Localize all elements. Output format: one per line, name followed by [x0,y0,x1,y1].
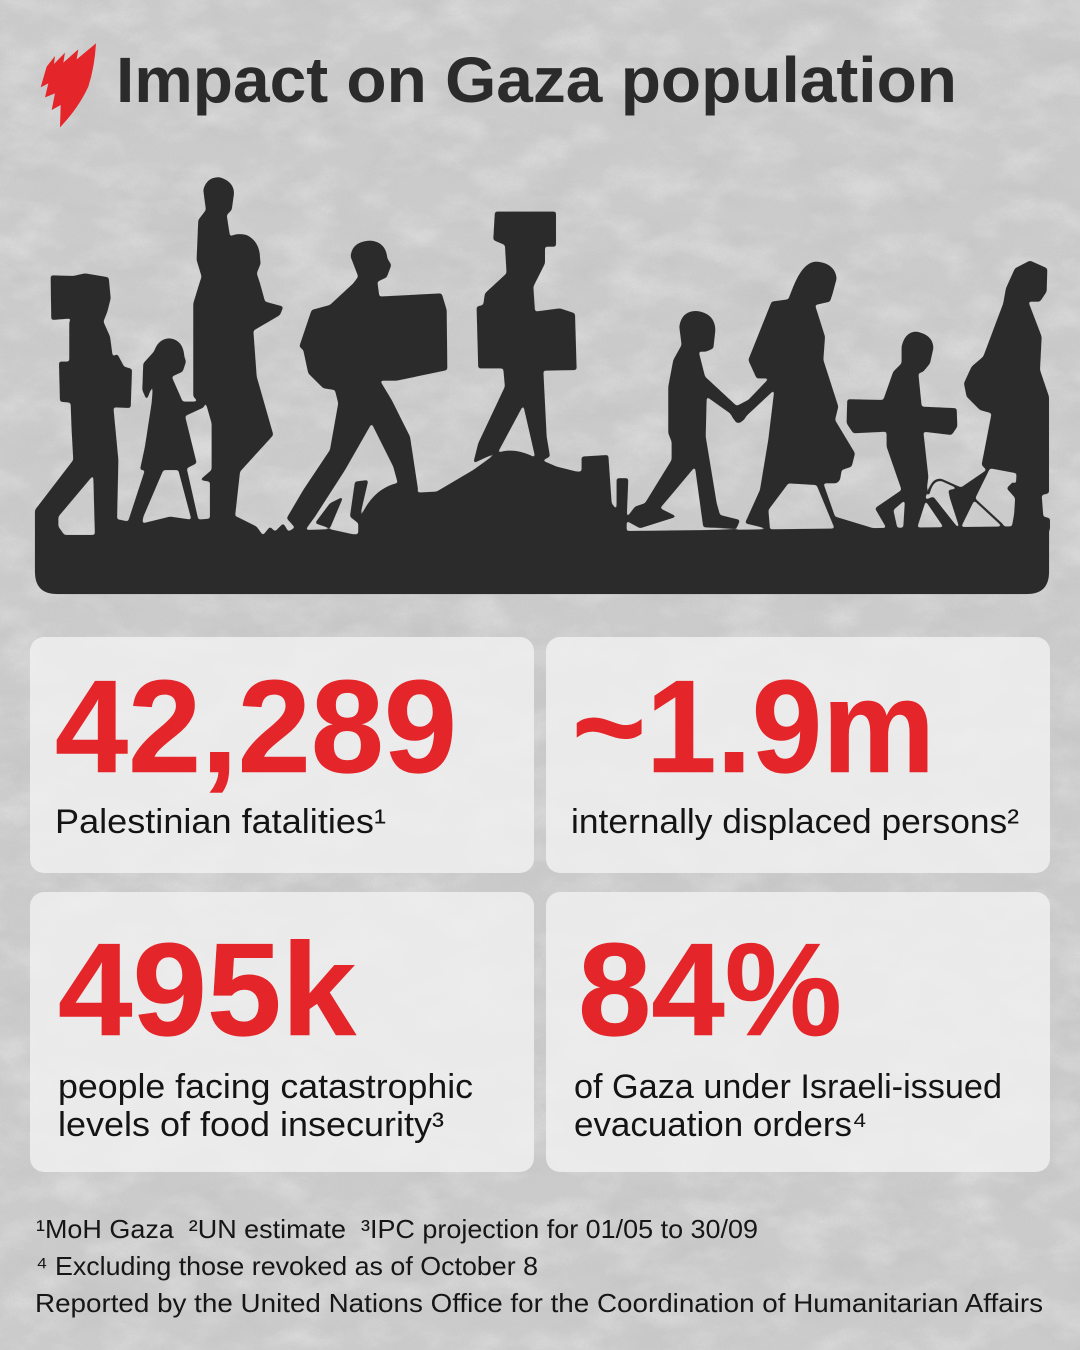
label: catastrophic food insecurity: people facing catastrophic [58,1068,473,1106]
label: evacuation orders [574,1068,1002,1144]
footnotes and sources: ¹MoH Gaza ²UN estimate ³IPC projection for 01/05 to 30/09 [36,1214,758,1244]
stat: 84%: 84% [578,916,842,1063]
figure: woman with large bundle [925,261,1050,530]
figure: man with backpack and large box [287,241,447,535]
rubble mound and broken sticks [117,451,628,537]
figure: man carrying box on head and bundle [473,212,577,463]
label: evacuation orders: of Gaza under Israeli-issued [574,1068,1002,1106]
stat: 495k: 495k [58,916,357,1063]
figure: man carrying child on shoulders [193,177,283,536]
card: displaced persons [546,637,1050,873]
card: fatalities [30,637,534,873]
card: evacuation orders [546,892,1050,1172]
figure: woman with headscarf and handbag [733,262,873,529]
label: evacuation orders: evacuation orders⁴ [574,1106,867,1144]
stat: ~1.9m: ~1.9m [572,653,935,800]
stat: 42,289: 42,289 [55,653,457,800]
title: Impact on Gaza population [116,44,957,116]
logo: red SBS mark [41,43,96,127]
illustration: silhouettes of displaced people walking [35,177,1050,594]
figure: small boy carrying rolled mat [847,332,957,529]
label: internally displaced persons: internally displaced persons² [571,803,1019,841]
figure: girl with ponytail [127,338,207,527]
footnotes and sources: ⁴ Excluding those revoked as of October 8 [36,1251,538,1281]
card: food insecurity [30,892,534,1172]
footnotes and sources: Reported by the United Nations Office for the Coordination of Humanitarian Affairs [35,1288,1043,1318]
footnotes and sources [35,1214,1043,1318]
label: catastrophic food insecurity [58,1068,473,1144]
figure: boy holding hands [625,311,753,528]
ground band [35,520,1049,594]
label: catastrophic food insecurity: levels of food insecurity³ [58,1106,444,1144]
label: Palestinian fatalities: Palestinian fatalities¹ [55,803,386,841]
figure: woman carrying box and basket [35,273,132,537]
